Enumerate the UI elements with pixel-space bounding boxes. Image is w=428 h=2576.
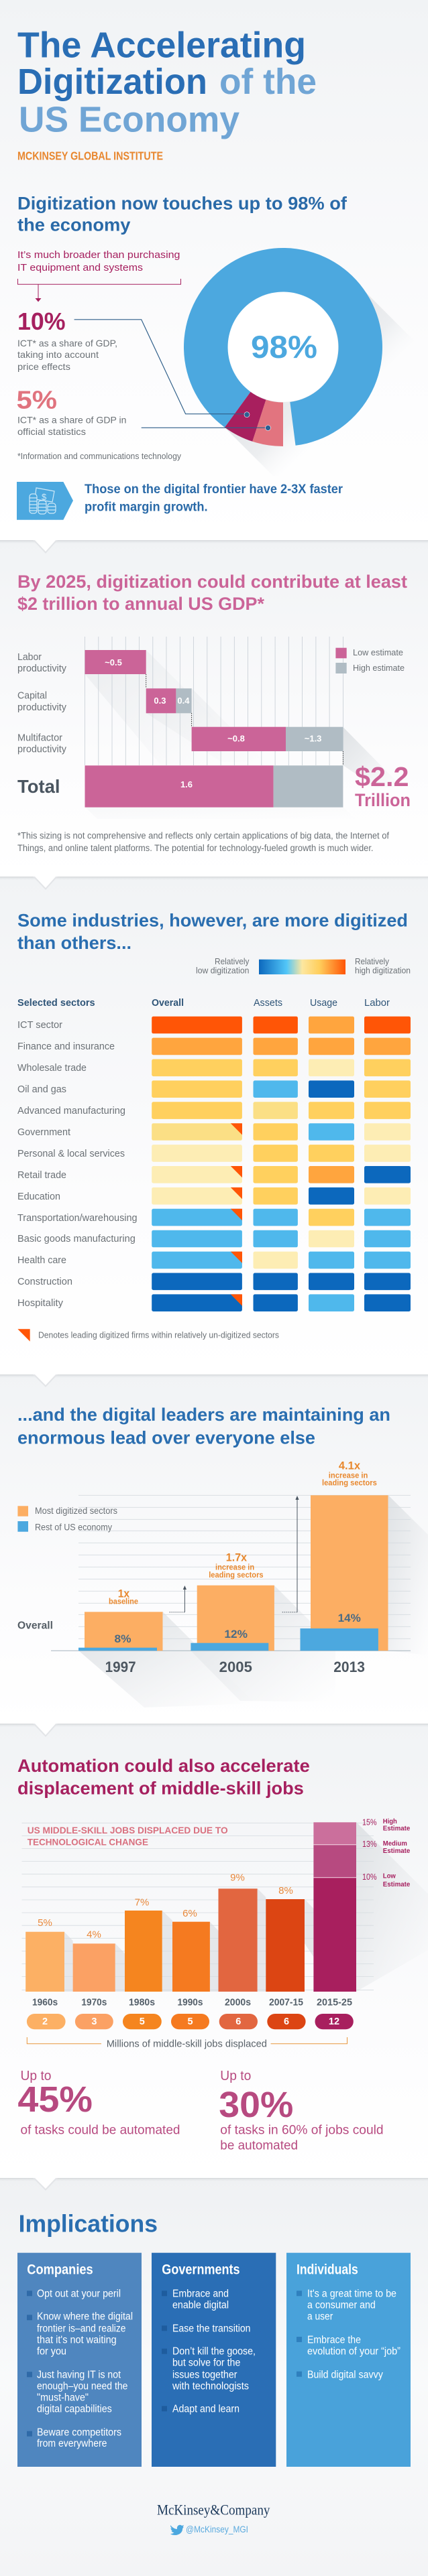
pills: millions of jobs displaced: 6 [235, 2016, 241, 2027]
panel: companies: frontier is–and realize [37, 2323, 126, 2334]
stat: 45%: 45% [17, 2079, 93, 2120]
heat table sector labels: Personal & local services [17, 1148, 125, 1159]
estimate labels: Estimate [383, 1847, 410, 1855]
stat: 5% ICT: 5% [16, 386, 57, 414]
arrow: 2005 to 2013 [282, 1496, 299, 1612]
heat table sector labels: Hospitality [17, 1297, 63, 1309]
panel: individuals: a consumer and [307, 2300, 376, 2311]
bar chart: digital leaders: leading sectors [322, 1480, 377, 1488]
heat table sector labels: Advanced manufacturing [17, 1105, 125, 1116]
panel: governments: Don’t kill the goose, [172, 2346, 256, 2358]
panel: companies: "must-have" [37, 2392, 89, 2403]
panel: governments: Ease the transition [172, 2323, 251, 2334]
chart row labels: Capital [17, 690, 47, 702]
bar chart: digital leaders: leading sectors [209, 1571, 264, 1580]
heat scale legend: low digitization [196, 966, 249, 976]
panel: companies: from everywhere [37, 2438, 107, 2449]
heading: digitization touches 98%: the economy [17, 215, 130, 235]
heading: automation: displacement of middle-skill jobs [17, 1779, 304, 1799]
estimate labels [362, 1817, 410, 1888]
heading: digital leaders: ...and the digital leaders are maintaining an [17, 1405, 390, 1425]
footnote: ICT definition: *Information and communications technology [17, 452, 182, 461]
panel: companies: that it's not waiting [37, 2335, 117, 2346]
estimate labels: High [383, 1817, 397, 1825]
stat: 30%: Up to [220, 2069, 251, 2083]
bar chart: digital leaders: 1x [118, 1587, 130, 1600]
panel: governments [152, 2253, 276, 2467]
bar chart: middle-skill jobs displaced: 2007-15 [269, 1997, 303, 2008]
panel: individuals: Build digital savvy [307, 2369, 383, 2380]
subtitle: McKinsey Global Institute: MCKINSEY GLOBAL INSTITUTE [17, 149, 163, 163]
stat: 10% ICT: ICT* as a share of GDP, [17, 338, 117, 348]
text: broader than IT [17, 249, 180, 273]
estimate labels: 15% [362, 1817, 377, 1827]
estimate labels: 10% [362, 1872, 377, 1882]
arrow: 1997 to 2005 [170, 1586, 186, 1612]
pills: millions of jobs displaced [27, 2014, 354, 2029]
twitter handle: @McKinsey_MGI [186, 2524, 248, 2534]
heat table sector labels: Education [17, 1191, 60, 1202]
heading: digital leaders [17, 1405, 390, 1447]
heat table header: Assets [254, 998, 282, 1009]
chart row labels: Total [17, 776, 60, 797]
heading: by 2025 [17, 572, 407, 614]
icon: coins and banknote: $ [42, 492, 47, 502]
donut chart: 98%: 98% [251, 329, 317, 365]
panel: governments: Adapt and learn [172, 2403, 239, 2414]
estimate labels: Estimate [383, 1825, 410, 1833]
stat: 10% ICT: taking into account [17, 349, 99, 360]
chart row labels: productivity [17, 744, 66, 755]
heat table sector labels: ICT sector [17, 1019, 62, 1031]
panel: companies: Just having IT is not [37, 2369, 121, 2380]
heat table sector labels: Finance and insurance [17, 1041, 115, 1052]
bar chart: middle-skill jobs displaced: US MIDDLE-SKILL JOBS DISPLACED DUE TO [28, 1825, 228, 1836]
table note: Denotes leading digitized firms within relatively un-digitized sectors [38, 1330, 279, 1340]
chart row labels: Labor [17, 651, 42, 663]
bar chart: digital leaders: increase in [329, 1472, 368, 1480]
heat table sector labels: Construction [17, 1276, 72, 1287]
heat scale legend [196, 957, 411, 976]
bar chart: digital leaders: 2005 [219, 1659, 252, 1675]
heat table header: Usage [310, 998, 337, 1009]
panel: governments: enable digital [172, 2300, 229, 2311]
waterfall chart: GDP contribution: ~1.3 [305, 734, 321, 744]
stat: 5% ICT: ICT* as a share of GDP in [17, 415, 126, 426]
panel: governments: with technologists [172, 2380, 249, 2392]
stat: 10% ICT [17, 308, 117, 372]
title: of the [219, 62, 317, 102]
bar chart: middle-skill jobs displaced: 2015-25 [317, 1997, 352, 2008]
bar chart: digital leaders: 14% [338, 1612, 361, 1624]
pills: millions of jobs displaced: 12 [329, 2016, 339, 2027]
stat: 30%: of tasks in 60% of jobs could [220, 2122, 384, 2137]
heat table sector labels [17, 1019, 138, 1309]
bar chart: digital leaders: 1.7x [226, 1551, 248, 1563]
bar chart: digital leaders: baseline [109, 1598, 138, 1606]
bar chart: middle-skill jobs displaced: 2000s [225, 1997, 251, 2008]
heat table sector labels: Basic goods manufacturing [17, 1233, 136, 1244]
text: broader than IT: IT equipment and systems [17, 262, 143, 273]
estimate labels: 13% [362, 1839, 377, 1849]
heat table sector labels: Government [17, 1126, 71, 1138]
bracket: millions of jobs: Millions of middle-skill jobs displaced [107, 2038, 267, 2049]
bar chart legend: Most digitized sectors [35, 1505, 117, 1516]
waterfall chart: GDP contribution: ~0.8 [227, 734, 245, 744]
pills: millions of jobs displaced: 5 [187, 2016, 193, 2027]
text: broader than IT: It’s much broader than purchasing [17, 249, 180, 261]
panel: companies: Companies [27, 2262, 93, 2277]
bar chart: middle-skill jobs displaced: 8% [278, 1885, 293, 1896]
panel: individuals: It's a great time to be [307, 2289, 396, 2300]
footnote: sizing: *This sizing is not comprehensive and reflects only certain applications of big data, the Internet of [17, 831, 389, 841]
panel: individuals: a user [307, 2311, 333, 2323]
donut chart: 98% [184, 248, 382, 446]
stat: 5% ICT: official statistics [17, 426, 86, 437]
stat: 5% ICT [16, 386, 126, 437]
callout: digital frontier: Those on the digital frontier have 2-3X faster [85, 482, 343, 497]
pills: millions of jobs displaced: 5 [140, 2016, 145, 2027]
heat table sector labels: Retail trade [17, 1169, 66, 1181]
stat: 10% ICT: price effects [17, 361, 70, 372]
heading: automation [17, 1756, 310, 1799]
panel: individuals: evolution of your “job” [307, 2346, 400, 2358]
panel: individuals: Individuals [297, 2262, 358, 2277]
stat: 30% [219, 2069, 384, 2152]
heat table sector labels: Health care [17, 1254, 66, 1266]
stat: 10% ICT: 10% [17, 308, 66, 335]
bar chart: middle-skill jobs displaced: 7% [135, 1896, 149, 1908]
icon: coins and banknote [30, 488, 56, 514]
estimate labels: Medium [383, 1840, 407, 1848]
donut long shadow [225, 292, 428, 489]
stat: 30%: be automated [220, 2138, 298, 2152]
bar chart: middle-skill jobs displaced: 4% [87, 1929, 101, 1941]
bar chart: digital leaders: 2013 [333, 1659, 365, 1675]
stat: 30%: 30% [219, 2085, 293, 2125]
title [17, 25, 317, 139]
waterfall chart: GDP contribution: ~0.5 [105, 657, 122, 667]
chart row labels: productivity [17, 663, 66, 674]
stat: 45%: of tasks could be automated [20, 2122, 180, 2137]
bar chart: digital leaders: increase in [215, 1564, 254, 1572]
panel: governments: issues together [172, 2369, 237, 2380]
leader lines [74, 320, 270, 430]
total callout: $2.2 trillion: $2.2 [355, 761, 409, 792]
bar chart: digital leaders: 12% [224, 1628, 248, 1640]
heat scale legend: Relatively [215, 957, 250, 966]
bar chart: middle-skill jobs displaced: 1960s [32, 1997, 58, 2008]
bracket: millions of jobs [27, 2037, 347, 2049]
panel: governments: Governments [162, 2262, 240, 2277]
footnote: sizing: Things, and online talent platforms. The potential for technology-fueled growth is much wider. [17, 843, 373, 853]
heading: some industries: Some industries, however, are more digitized [17, 910, 408, 930]
pills: millions of jobs displaced: 3 [91, 2016, 97, 2027]
panel: companies: Opt out at your peril [37, 2289, 121, 2300]
heading: by 2025: By 2025, digitization could contribute at least [17, 572, 407, 592]
heat table header: Selected sectors [17, 998, 95, 1009]
panel: individuals: Embrace the [307, 2335, 361, 2346]
panel: individuals [286, 2253, 411, 2467]
bar chart: middle-skill jobs displaced: 6% [182, 1908, 197, 1919]
waterfall chart: GDP contribution [85, 637, 403, 819]
chart legend [335, 647, 405, 673]
callout: digital frontier [17, 482, 343, 520]
heat table sector labels: Wholesale trade [17, 1062, 87, 1074]
chart row labels [17, 651, 66, 797]
estimate labels: Low [383, 1872, 396, 1880]
heading: some industries: than others... [17, 933, 131, 953]
total callout: $2.2 trillion [355, 761, 411, 810]
bar chart legend: Rest of US economy [35, 1521, 112, 1532]
row label: overall: Overall [17, 1620, 53, 1632]
heading: digital leaders: enormous lead over everyone else [17, 1427, 315, 1447]
title: The Accelerating [17, 25, 306, 66]
bar chart: digital leaders: 1997 [105, 1659, 136, 1675]
chart row labels: productivity [17, 702, 66, 713]
bar chart: middle-skill jobs displaced: TECHNOLOGICAL CHANGE [28, 1836, 148, 1847]
bar chart: middle-skill jobs displaced: 1990s [177, 1997, 203, 2008]
bar chart: digital leaders: 4.1x [339, 1459, 361, 1472]
bar chart: middle-skill jobs displaced: 1980s [129, 1997, 155, 2008]
bar chart legend [17, 1505, 117, 1532]
heading: automation: Automation could also accelerate [17, 1756, 310, 1776]
heat scale legend: Relatively [355, 957, 390, 966]
title: Digitization [17, 62, 207, 102]
heat table sector labels: Oil and gas [17, 1084, 66, 1095]
pills: millions of jobs displaced: 2 [42, 2016, 48, 2027]
stat: 45% [17, 2069, 180, 2137]
heading: implications: Implications [19, 2210, 158, 2238]
panel: companies: digital capabilities [37, 2403, 112, 2414]
estimate labels: Estimate [383, 1880, 410, 1888]
bar chart: middle-skill jobs displaced: 5% [38, 1917, 52, 1929]
panel: companies: for you [37, 2345, 66, 2357]
chart legend: Low estimate [353, 647, 403, 657]
bar chart: digital leaders [51, 1459, 428, 1708]
panel: companies: enough–you need the [37, 2380, 127, 2392]
chart row labels: Multifactor [17, 732, 62, 744]
bar chart: digital leaders: 8% [114, 1632, 131, 1645]
title: US Economy [19, 99, 239, 139]
heading: by 2025: $2 trillion to annual US GDP* [17, 594, 264, 614]
heat table header [17, 998, 390, 1009]
heat table header: Overall [152, 998, 184, 1009]
heat table header: Labor [364, 998, 390, 1009]
bar chart: middle-skill jobs displaced: 9% [230, 1872, 245, 1884]
footer logo: McKinsey & Company: McKinsey&Company [157, 2502, 270, 2518]
waterfall chart: GDP contribution: 0.3 [154, 696, 166, 706]
heading: digitization touches 98%: Digitization now touches up to 98% of [17, 193, 347, 213]
heading: digitization touches 98% [17, 193, 347, 235]
heat scale legend: high digitization [355, 966, 411, 976]
panel: companies: Beware competitors [37, 2427, 121, 2438]
pills: millions of jobs displaced: 6 [284, 2016, 289, 2027]
panel: companies [17, 2253, 142, 2467]
icon: twitter bird [170, 2525, 184, 2535]
heading: some industries [17, 910, 408, 953]
stat: 45%: Up to [20, 2069, 51, 2083]
bracket and arrow [17, 279, 181, 302]
heat table sector labels: Transportation/warehousing [17, 1212, 138, 1224]
panel: companies: Know where the digital [37, 2311, 133, 2323]
callout: digital frontier: profit margin growth. [85, 501, 208, 515]
footnote: sizing [17, 831, 389, 853]
bar chart: middle-skill jobs displaced [21, 1822, 428, 2008]
panel: governments: but solve for the [172, 2357, 240, 2368]
heat table cells [152, 1017, 411, 1311]
chart legend: High estimate [353, 663, 405, 673]
bar chart: middle-skill jobs displaced: 1970s [81, 1997, 107, 2008]
waterfall chart: GDP contribution: 1.6 [180, 779, 193, 789]
waterfall chart: GDP contribution: 0.4 [177, 696, 190, 706]
panel: governments: Embrace and [172, 2289, 229, 2300]
total callout: $2.2 trillion: Trillion [355, 790, 411, 810]
